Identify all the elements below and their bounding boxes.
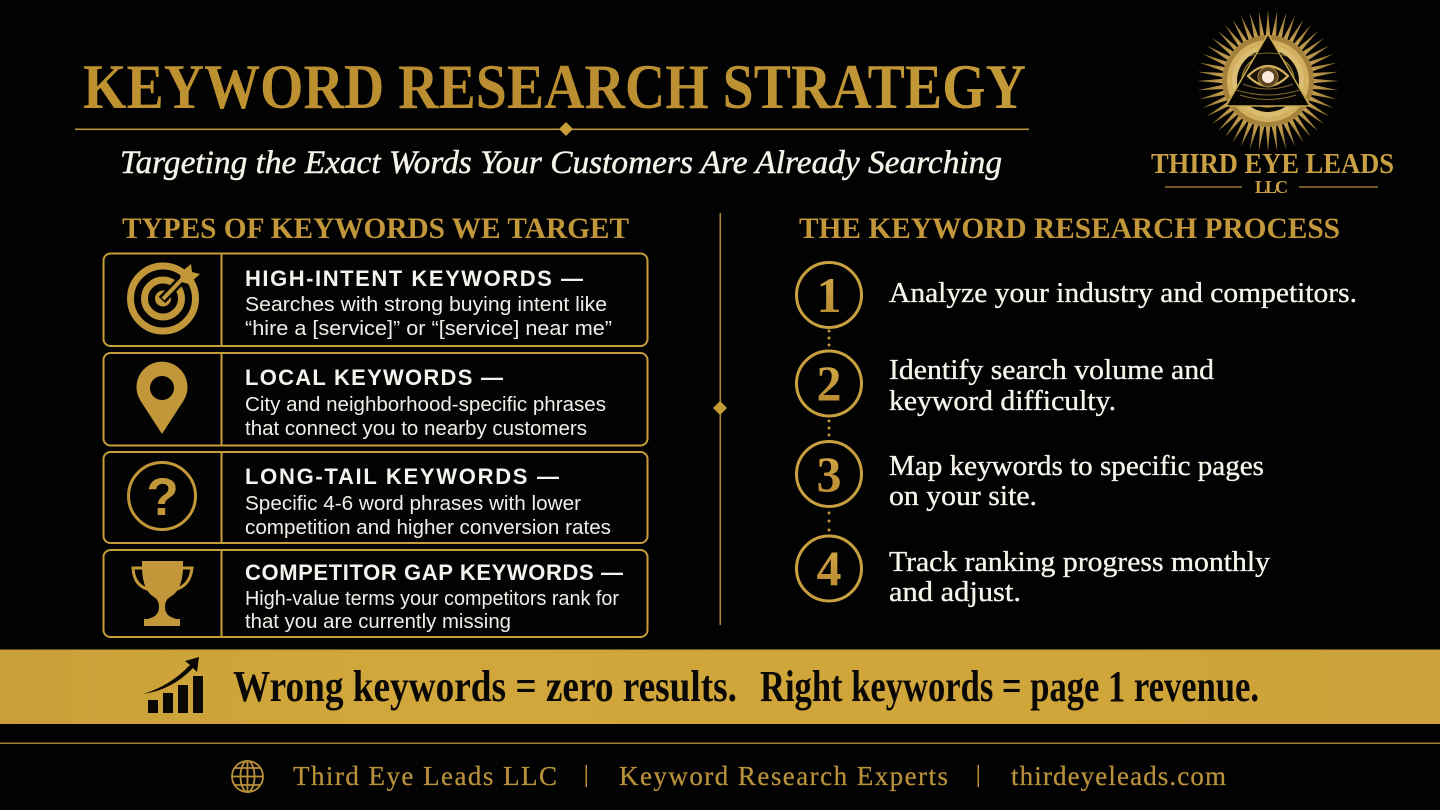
- logo: Third Eye Leads: [1151, 5, 1394, 197]
- central vertical divider: [713, 213, 727, 625]
- footer: [232, 761, 1226, 792]
- card text line 1: City and neighborhood-specific phrases: [245, 394, 606, 416]
- step 2: keyword difficulty.: [889, 385, 1116, 417]
- subtitle: Targeting the Exact Words Your Customers Are Already Searching: [120, 145, 1002, 181]
- card text line 2: “hire a [service]” or “[service] near me”: [245, 318, 612, 340]
- gold banner: [0, 650, 1440, 724]
- step 1: [796, 262, 1357, 328]
- heading: process: THE KEYWORD RESEARCH PROCESS: [799, 212, 1340, 245]
- card title: LONG-TAIL KEYWORDS —: [245, 464, 559, 489]
- panel: long-tail keywords: [104, 452, 648, 543]
- card title: HIGH-INTENT KEYWORDS —: [245, 266, 583, 291]
- panel: local keywords: [104, 353, 648, 446]
- logo rules: [1165, 186, 1378, 188]
- step 4: 4: [816, 540, 842, 596]
- card text line 1: Specific 4-6 word phrases with lower: [245, 493, 581, 515]
- step 2: 2: [816, 355, 842, 411]
- step 3: on your site.: [889, 480, 1037, 512]
- panel: high-intent keywords: [104, 254, 648, 346]
- card text line 2: that connect you to nearby customers: [245, 418, 587, 440]
- step 2: Identify search volume and: [889, 354, 1215, 386]
- icon: target with arrow: [130, 264, 200, 331]
- step 1: Analyze your industry and competitors.: [889, 277, 1357, 309]
- footer website: thirdeyeleads.com: [1011, 761, 1226, 791]
- icon: map pin: [137, 362, 188, 434]
- step 3: Map keywords to specific pages: [889, 450, 1264, 482]
- card title: COMPETITOR GAP KEYWORDS —: [245, 560, 623, 585]
- process steps: [796, 262, 1357, 608]
- step 3: 3: [816, 446, 842, 502]
- connector dots: [828, 330, 830, 532]
- icon: rising bar chart: [143, 657, 203, 713]
- icon: globe: [232, 761, 263, 792]
- logo wordmark: THIRD EYE LEADS: [1151, 148, 1394, 180]
- step 4: Track ranking progress monthly: [889, 546, 1270, 578]
- banner text right: Right keywords = page 1 revenue.: [760, 662, 1259, 711]
- step 4: [796, 536, 1270, 608]
- step 2: [796, 351, 1215, 417]
- icon: question mark: [128, 462, 196, 530]
- icon: all-seeing eye sunburst: [1192, 5, 1344, 157]
- icon: question mark: ?: [146, 468, 179, 527]
- footer company: Third Eye Leads LLC: [293, 761, 557, 791]
- footer tagline: Keyword Research Experts: [619, 761, 948, 791]
- logo LLC: LLC: [1255, 177, 1288, 197]
- title: KEYWORD RESEARCH STRATEGY: [83, 52, 1026, 122]
- banner text left: Wrong keywords = zero results.: [233, 662, 737, 711]
- icon: trophy: [133, 561, 192, 626]
- footer rule: [0, 742, 1440, 744]
- card text line 2: that you are currently missing: [245, 611, 511, 633]
- footer separator: [586, 765, 587, 787]
- card text line 1: High-value terms your competitors rank for: [245, 588, 619, 610]
- panel: competitor gap keywords: [104, 550, 648, 637]
- title divider with diamond: [75, 122, 1029, 136]
- step 4: and adjust.: [889, 576, 1021, 608]
- step 1: 1: [816, 267, 842, 323]
- card text line 1: Searches with strong buying intent like: [245, 294, 607, 316]
- heading: types of keywords: TYPES OF KEYWORDS WE TARGET: [122, 212, 629, 245]
- card title: LOCAL KEYWORDS —: [245, 365, 503, 390]
- card text line 2: competition and higher conversion rates: [245, 517, 611, 539]
- step 3: [796, 442, 1264, 512]
- footer separator: [978, 765, 979, 787]
